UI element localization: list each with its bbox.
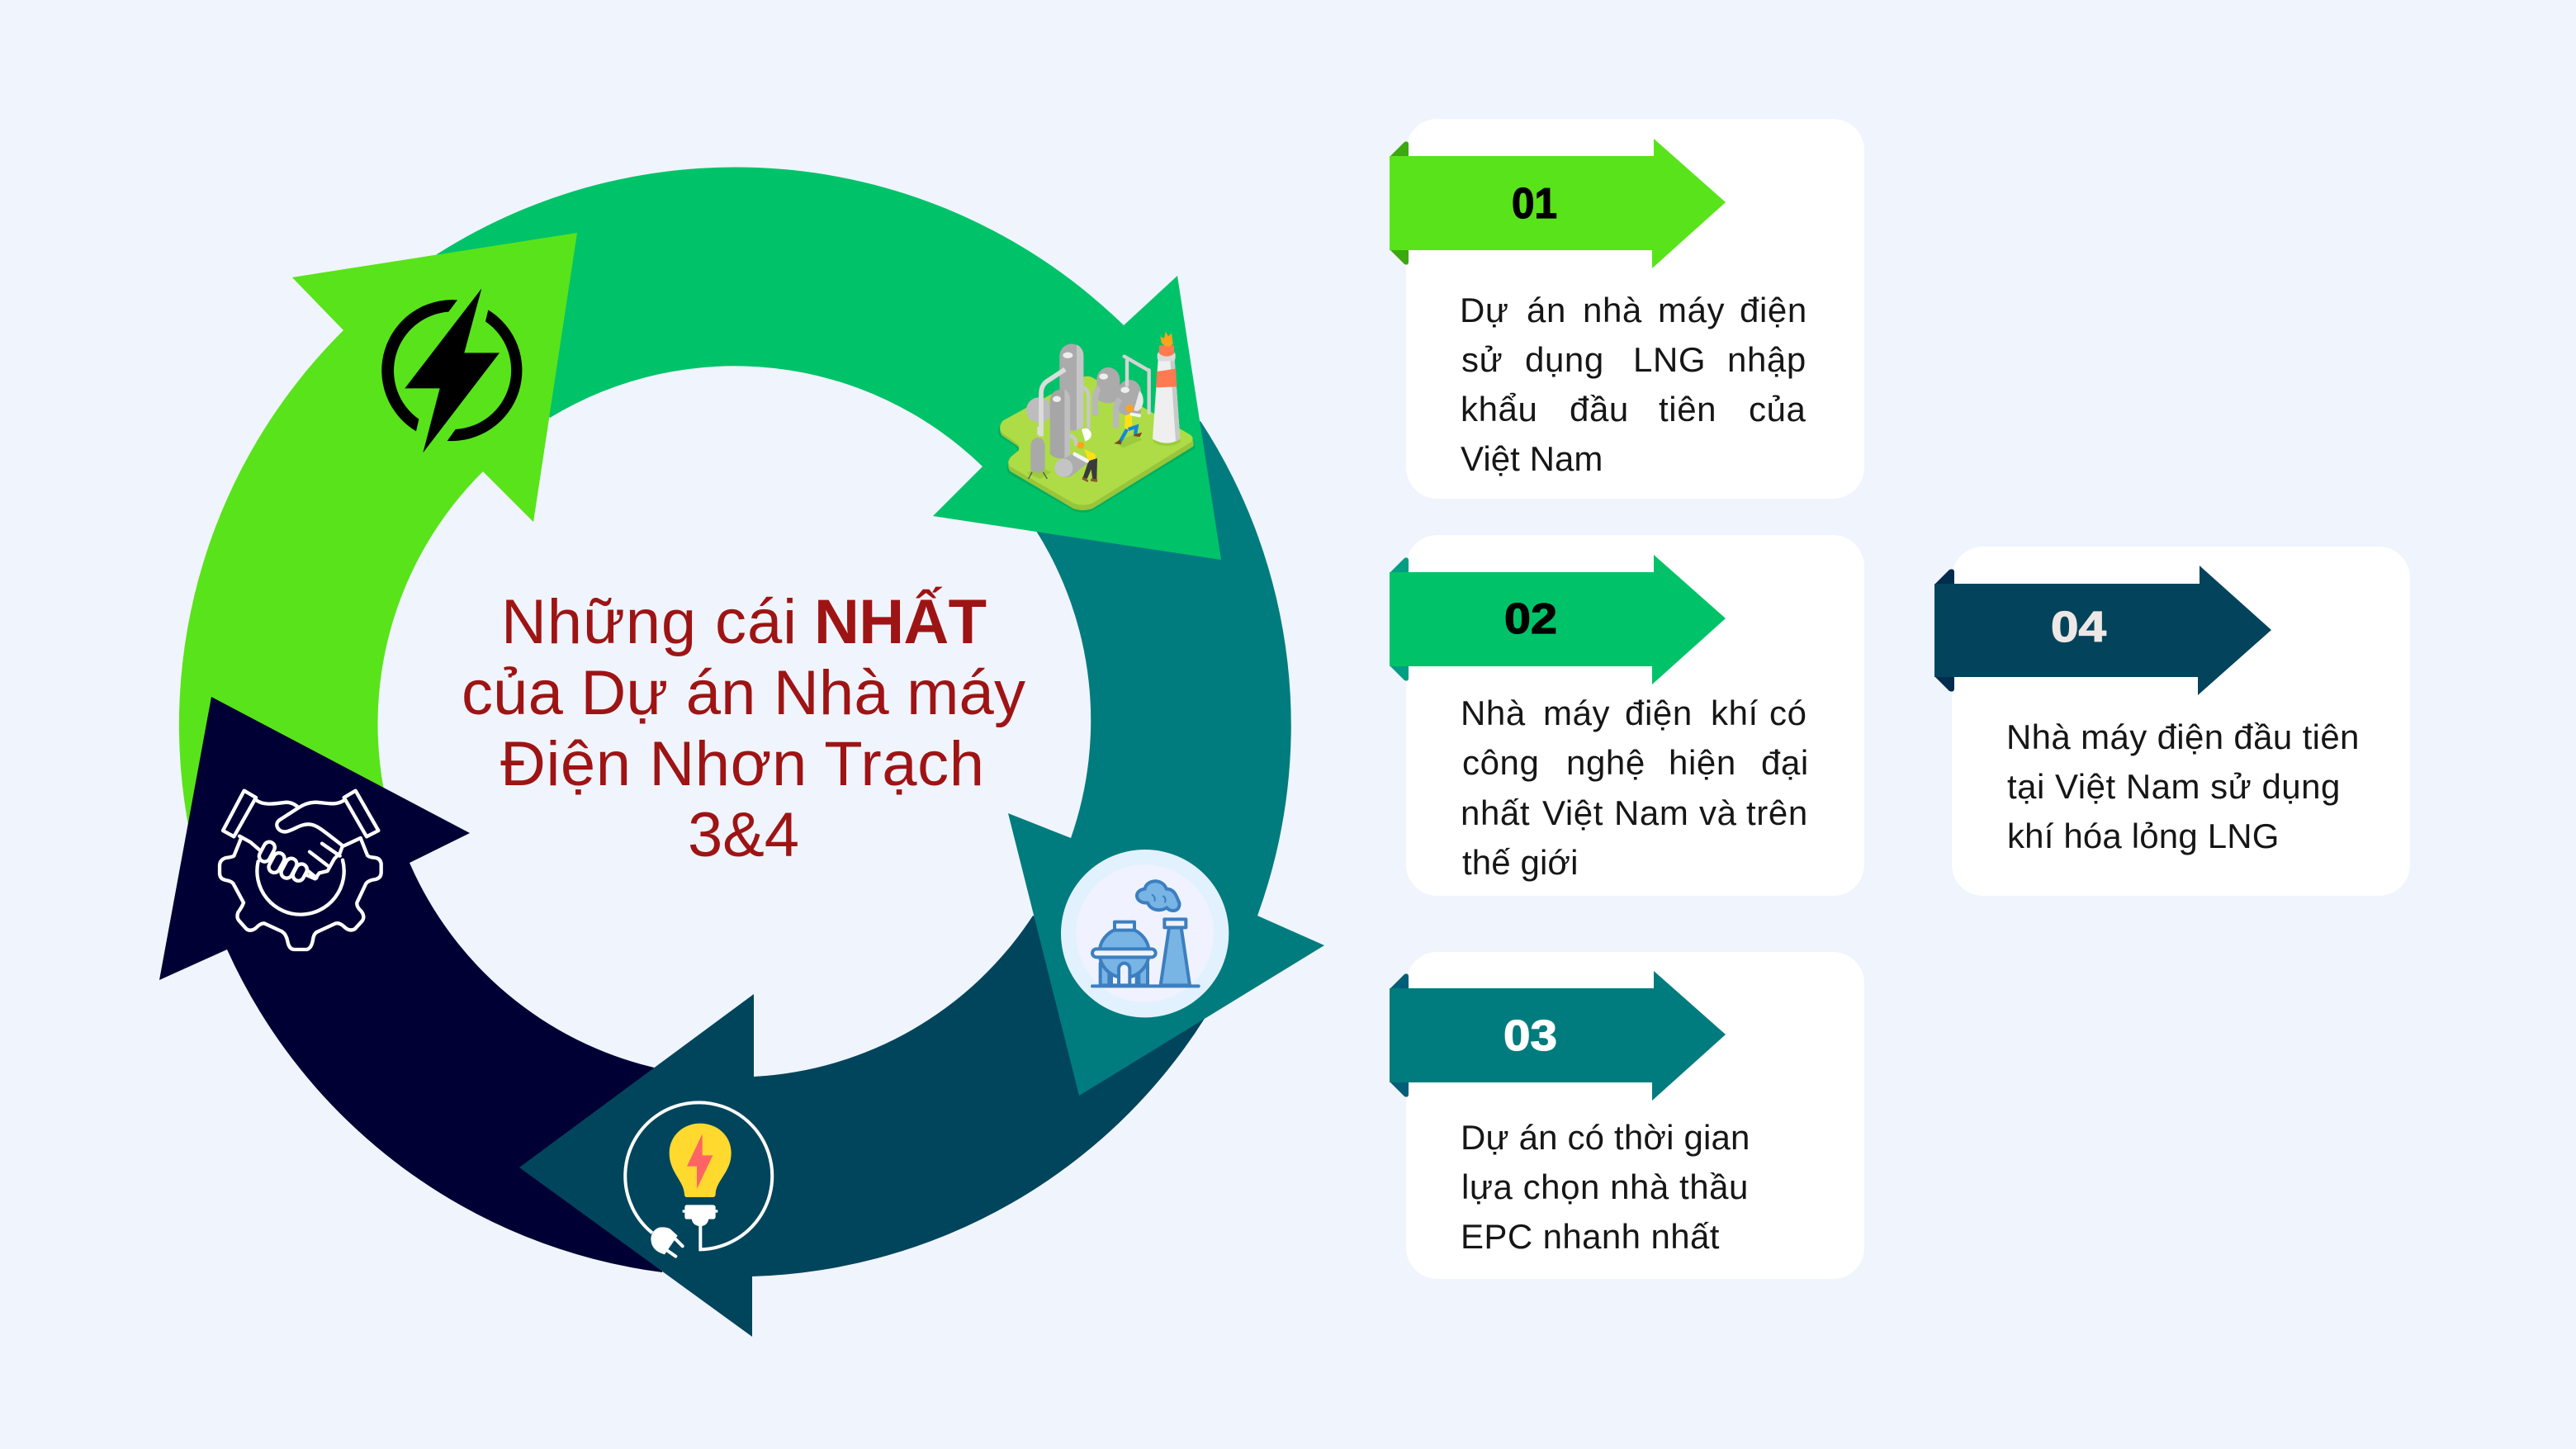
cycle arrow: teal (1008, 421, 1324, 1096)
text block 02: khí (1711, 694, 1769, 732)
panel: card 01 (1390, 119, 1864, 499)
text block 02: công (1462, 743, 1550, 782)
icon: factory in circle (1061, 850, 1229, 1017)
text block 01: tiên (1659, 390, 1726, 429)
number 03: 03 (1503, 1012, 1557, 1060)
text block 02: Nam (1614, 793, 1699, 832)
text block 02: và (1699, 793, 1747, 832)
text block 02: Nhà (1461, 694, 1536, 732)
text block 02: hiện (1669, 743, 1746, 782)
text block 01: nhà (1583, 291, 1652, 329)
cycle arrow: green (437, 167, 1221, 560)
ribbon arrow 01 (1390, 139, 1726, 268)
text block 03: EPC nhanh nhất (1461, 1217, 1720, 1256)
text block 04: Nhà máy điện đầu tiên (2006, 717, 2360, 756)
text block 02: thế giới (1462, 843, 1579, 882)
text block 01: nhập (1727, 340, 1807, 379)
text block 01: Dự (1460, 291, 1519, 329)
icon: light bulb with plug (625, 1102, 772, 1257)
panel: card 04 (1934, 547, 2410, 896)
panel: card 02 (1390, 535, 1864, 896)
ribbon arrow 04 (1934, 566, 2271, 695)
text block 02: Việt (1542, 793, 1613, 832)
text block 03: lựa chọn nhà thầu (1461, 1167, 1749, 1206)
text block 02: máy (1543, 694, 1620, 732)
text block 01: dụng (1525, 340, 1614, 379)
number 01: 01 (1512, 180, 1557, 228)
text block 02: nhất (1461, 793, 1540, 832)
text block 03: Dự án có thời gian (1461, 1118, 1750, 1157)
text block 01: đầu (1570, 390, 1639, 429)
text block 04: tại Việt Nam sử dụng (2007, 767, 2341, 806)
text block 01: của (1749, 390, 1807, 429)
text block 04 (2006, 717, 2360, 855)
text block 02 (1461, 694, 1809, 882)
icon: handshake in gear (220, 791, 381, 949)
text block 01: điện (1740, 291, 1807, 329)
number 04: 04 (2051, 604, 2106, 651)
title: NHẤT (814, 587, 987, 657)
ribbon arrow 02 (1390, 555, 1726, 684)
text block 01: án (1527, 291, 1576, 329)
text block 01 (1460, 291, 1807, 478)
cycle arrowhead: lime (292, 233, 577, 522)
title: Những cái (501, 587, 797, 657)
text block 01: Việt Nam (1461, 439, 1603, 478)
text block 04: khí hóa lỏng LNG (2007, 817, 2280, 855)
icon: lightning bolt in ring (381, 288, 522, 452)
text block 01: sử (1461, 340, 1513, 379)
title (462, 587, 1025, 870)
text block 02: đại (1761, 743, 1809, 782)
text block 01: khẩu (1461, 390, 1548, 429)
panel: card 03 (1390, 952, 1864, 1279)
ribbon arrow 03 (1390, 971, 1726, 1101)
text block 02: có (1769, 694, 1807, 732)
text block 01: LNG (1633, 340, 1716, 379)
text block 02: điện (1625, 694, 1702, 732)
cycle arrow: navy (159, 697, 662, 1272)
text block 03 (1461, 1118, 1750, 1256)
icon: gas plant illustration (998, 332, 1195, 513)
title: 3&4 (688, 800, 799, 870)
text block 02: nghệ (1566, 743, 1655, 782)
cycle arrow: dark teal (519, 916, 1205, 1337)
text block 01: máy (1658, 291, 1735, 329)
number 02: 02 (1504, 595, 1557, 643)
cycle segment: lime body (179, 233, 577, 834)
title: Điện Nhơn Trạch (500, 729, 984, 799)
text block 02: trên (1746, 793, 1808, 832)
title: của Dự án Nhà máy (462, 658, 1025, 728)
